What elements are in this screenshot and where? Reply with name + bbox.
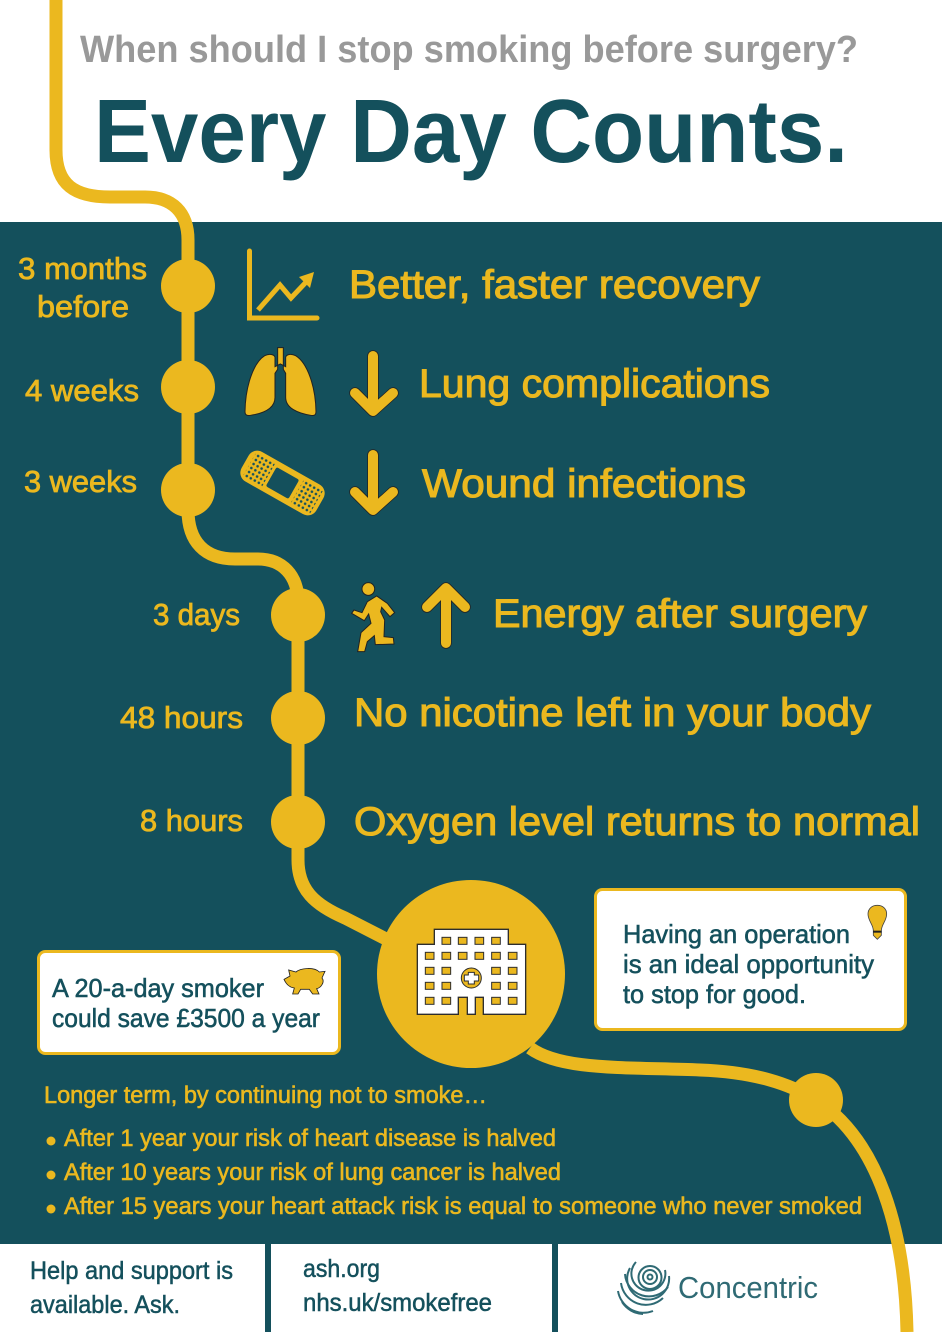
icon: hospital [417,929,526,1014]
time label: 4 weeks: 4 weeks [25,373,139,408]
footer: links: ash.org [303,1255,380,1283]
title: Every Day Counts: Every Day Counts. [94,82,848,182]
longer term list: After 10 years your risk of lung cancer is halved [64,1159,561,1186]
longer term list: After 15 years your heart attack risk is equal to someone who never smoked [64,1193,862,1220]
logo: Concentric wordmark: Concentric [678,1270,818,1305]
benefit: wound infections: Wound infections [422,462,746,506]
callout: ideal opportunity: is an ideal opportunity [623,949,874,979]
icon: light bulb [868,905,887,939]
timeline marker: 3 months [161,259,215,313]
panel: teal background [0,222,942,1244]
time label: 3 weeks: 3 weeks [24,464,137,499]
footer: links [303,1255,492,1317]
hospital circle [377,880,565,1068]
time label: 48 hours: 48 hours [120,700,243,735]
timeline marker: after surgery [789,1073,843,1127]
footer: help and support [30,1257,233,1319]
longer term heading: Longer term, by continuing not to smoke… [44,1082,487,1109]
benefit: oxygen level: Oxygen level returns to normal [354,800,920,844]
icon: running person [352,583,395,652]
logo: Concentric spiral [618,1262,669,1314]
timeline marker: 3 weeks [161,463,215,517]
callout: savings: could save £3500 a year [52,1003,320,1033]
icon: bandage [237,447,328,519]
timeline marker: 4 weeks [161,360,215,414]
benefit: lung complications: Lung complications [419,362,770,406]
time label: 8 hours: 8 hours [140,803,243,838]
icon: up arrow [427,588,465,643]
timeline marker: 8 hours [271,795,325,849]
title: question: When should I stop smoking before surgery? [80,29,858,71]
icon: lungs [245,348,316,416]
benefit: better, faster recovery: Better, faster recovery [349,263,760,307]
longer term list [46,1125,862,1220]
footer divider [552,1244,558,1332]
icon: down arrow, lung complications [355,356,393,411]
time label: 3 months before: before [37,289,129,324]
footer: help and support: available. Ask. [30,1291,180,1319]
callout: savings [38,952,340,1054]
time label: 3 months before: 3 months [18,251,147,286]
benefit: energy after surgery: Energy after surgery [493,592,867,636]
footer divider [265,1244,271,1332]
callout: ideal opportunity: to stop for good. [623,979,806,1009]
longer term list: After 1 year your risk of heart disease is halved [64,1125,556,1152]
icon: piggy bank [284,968,325,994]
time label: 3 days: 3 days [153,597,240,632]
time label: 3 months before [18,251,147,324]
timeline marker: 3 days [271,588,325,642]
callout: savings: A 20-a-day smoker [52,973,264,1003]
callout: ideal opportunity: Having an operation [623,919,850,949]
timeline marker: 48 hours [271,691,325,745]
footer: help and support: Help and support is [30,1257,233,1285]
icon: down arrow, wound infections [355,455,393,510]
footer: links: nhs.uk/smokefree [303,1289,492,1317]
callout: ideal opportunity [596,890,906,1030]
icon: rising chart [250,251,317,318]
benefit: no nicotine: No nicotine left in your body [354,691,871,735]
